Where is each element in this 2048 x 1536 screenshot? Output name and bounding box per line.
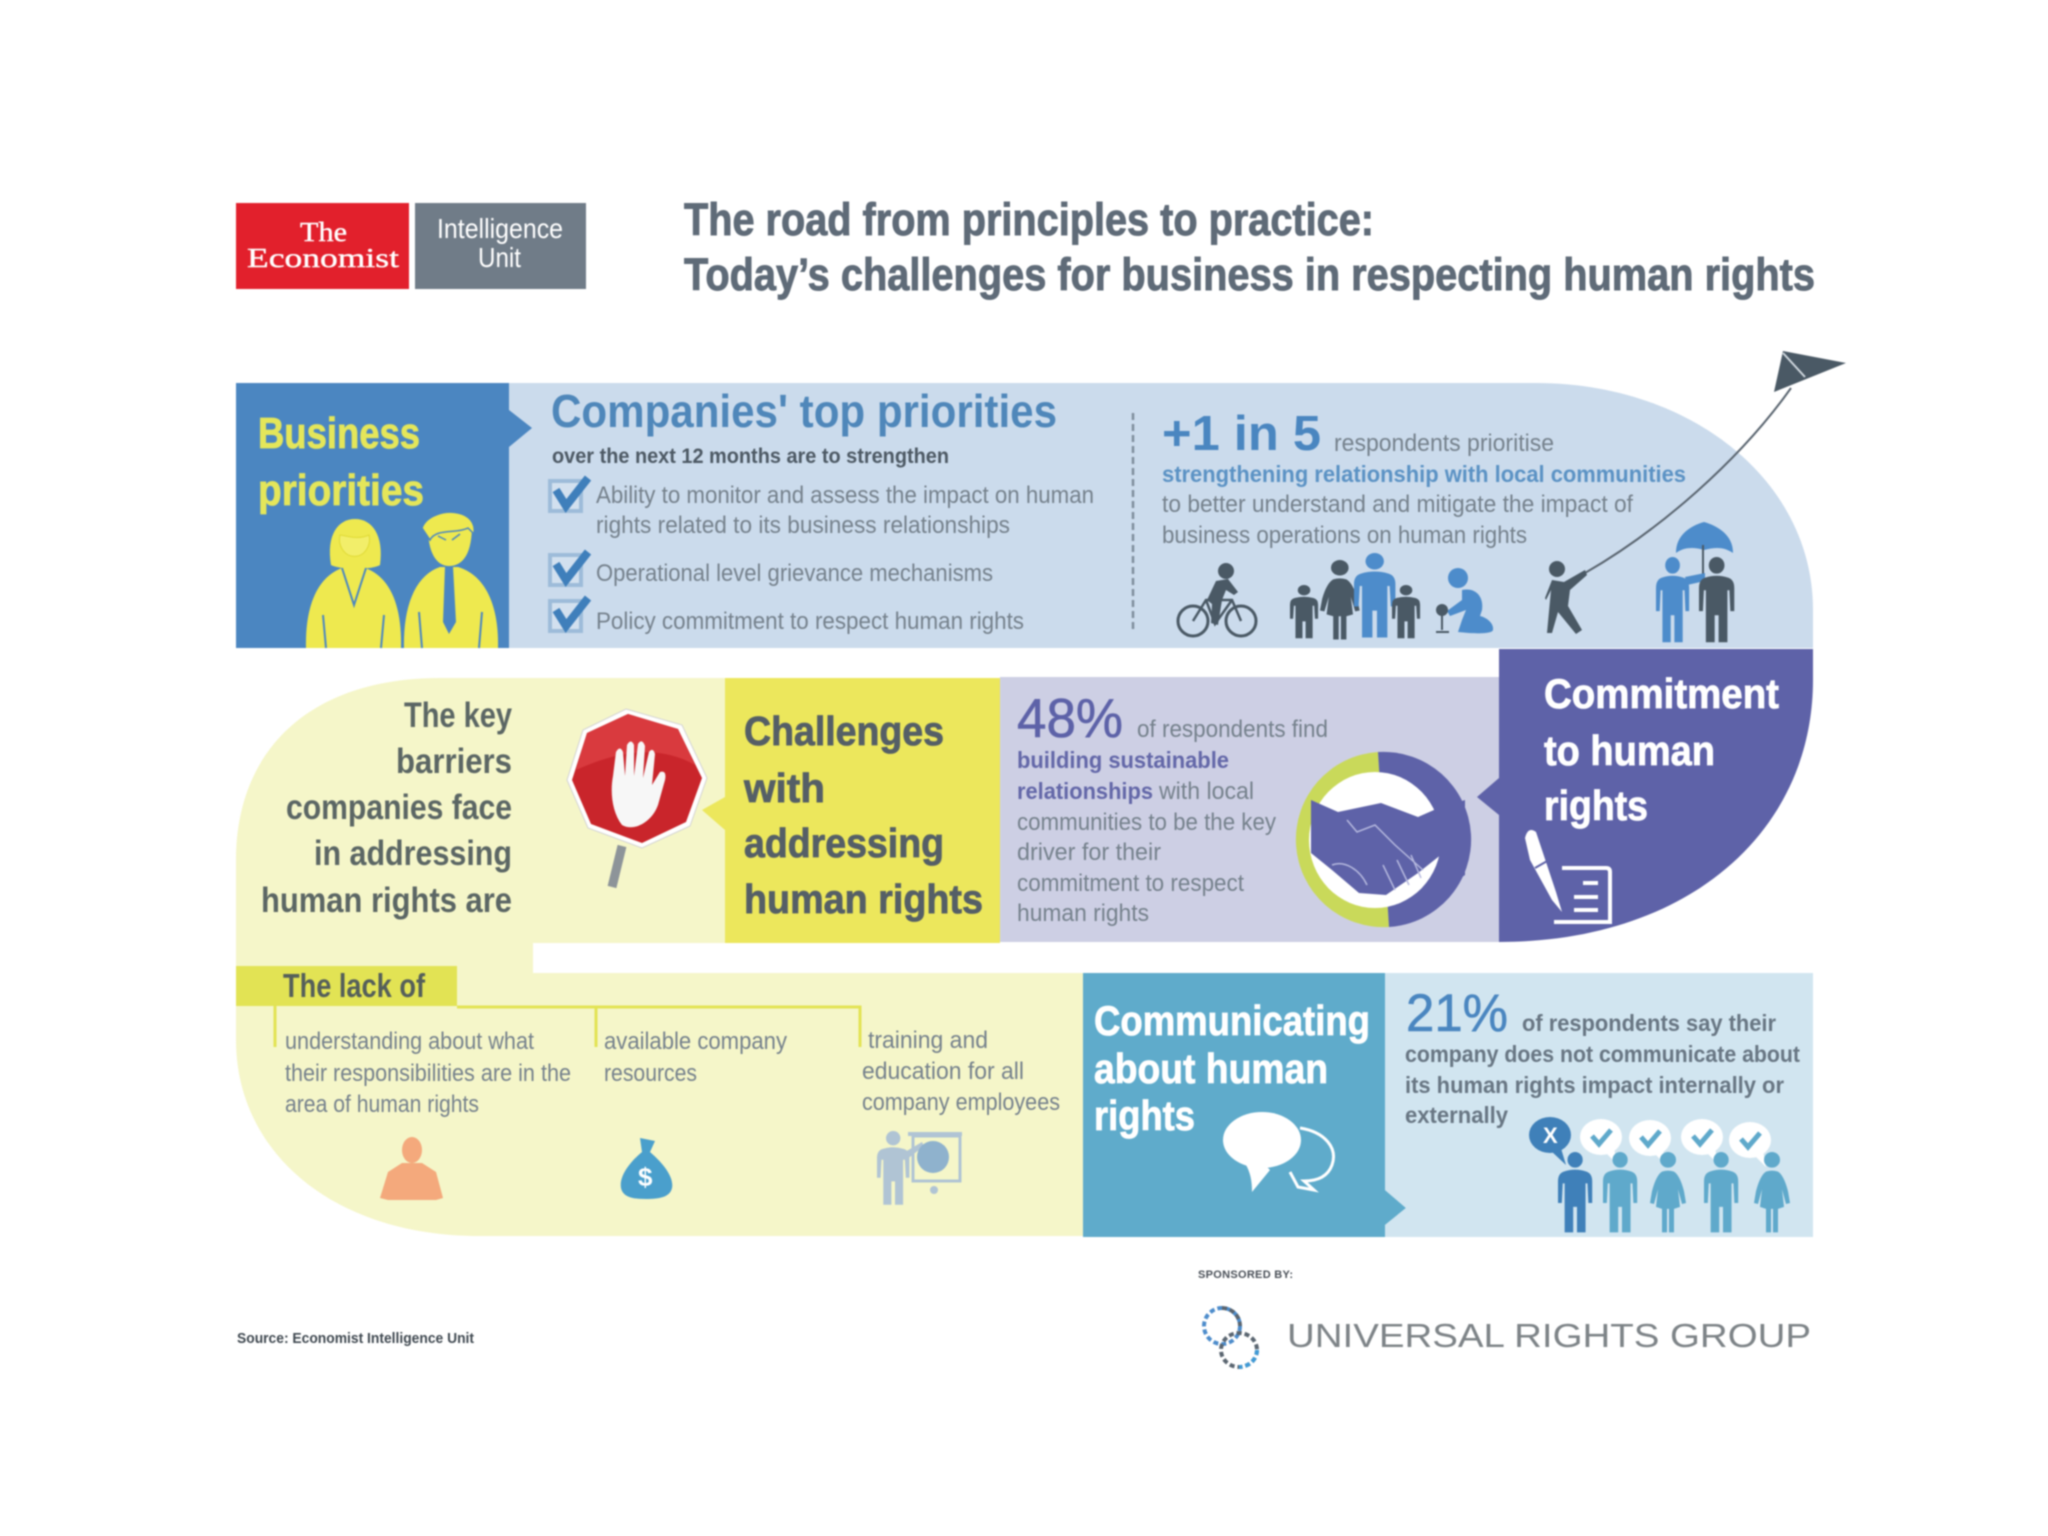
panel: challenges and lack-of band background: [236, 678, 1083, 1236]
panel: 48% statistic: with local: [1158, 778, 1254, 805]
icon: person reading: [380, 1137, 443, 1200]
text: +1 in 5 statistic: to better understand and mitigate the impact of: [1162, 491, 1633, 518]
panel: 48% statistic: human rights: [1017, 900, 1149, 927]
panel: challenges with addressing human rights: with: [743, 765, 825, 811]
text: priorities list: Policy commitment to respect human rights: [596, 608, 1024, 635]
panel: commitment to human rights: to human: [1544, 727, 1715, 774]
panel: 48% statistic: building sustainable: [1017, 747, 1229, 773]
panel: 48% statistic: commitment to respect: [1017, 870, 1244, 897]
text: priorities list: over the next 12 months are to strengthen: [552, 445, 949, 468]
icon: five people with speech bubbles: X: [1543, 1123, 1558, 1148]
title: Today’s challenges for business in respecting human rights: [684, 249, 1815, 300]
logo: The Economist Intelligence Unit: Economist: [247, 243, 400, 273]
icon: five people with speech bubbles: [1529, 1117, 1790, 1232]
icon: person planting flower: [1436, 568, 1493, 633]
text: key barriers: human rights are: [261, 881, 512, 920]
text: barrier column 1: [285, 1028, 571, 1118]
icon: businesswoman: [306, 519, 401, 648]
panel: 48% statistic: relationships: [1017, 778, 1153, 804]
icon: child flying kite: [1545, 351, 1846, 634]
panel: companies' top priorities: [509, 383, 1813, 648]
text: priorities list: [550, 445, 1094, 635]
panel: 48% statistic: [1000, 677, 1499, 942]
panel: communicating about human rights: about human: [1094, 1045, 1328, 1092]
panel: 21% statistic: 21%: [1406, 984, 1508, 1043]
logo: The Economist Intelligence Unit: The: [300, 217, 347, 247]
text: +1 in 5 statistic: business operations on human rights: [1162, 522, 1527, 549]
panel: 21% statistic: of respondents say their: [1522, 1010, 1776, 1036]
text: priorities list: Ability to monitor and assess the impact on human: [596, 482, 1094, 509]
text: +1 in 5 statistic: [1162, 407, 1686, 549]
text: barrier column 3: training and: [868, 1027, 988, 1054]
panel: 21% statistic: externally: [1405, 1102, 1508, 1128]
text: +1 in 5 statistic: respondents prioritise: [1334, 430, 1554, 457]
text: key barriers: [261, 696, 512, 920]
tag: the lack of: [236, 966, 860, 1047]
icon: checkbox 2: [550, 552, 588, 585]
title: [684, 194, 1815, 300]
title: The road from principles to practice:: [684, 194, 1374, 245]
panel: 48% statistic: driver for their: [1017, 839, 1161, 866]
logo: Universal Rights Group: [1204, 1308, 1811, 1367]
text: barrier column 2: [604, 1028, 787, 1087]
icon: checkbox 1: [550, 478, 588, 511]
panel: 21% statistic: company does not communicate about: [1405, 1041, 1800, 1067]
text: barrier column 3: company employees: [862, 1089, 1060, 1116]
panel: 48% statistic: of respondents find: [1137, 716, 1328, 743]
text: barrier column 2: available company: [604, 1028, 787, 1055]
icon: money bag: [621, 1138, 672, 1199]
icon: cyclist: [1178, 563, 1256, 636]
tag: the lack of: The lack of: [283, 967, 426, 1004]
panel: challenges with addressing human rights: human rights: [744, 876, 983, 922]
panel: challenges with addressing human rights: addressing: [744, 820, 944, 866]
panel: 48% statistic: communities to be the key: [1017, 809, 1276, 836]
text: barrier column 2: resources: [604, 1060, 697, 1087]
panel: challenges with addressing human rights: [702, 678, 1000, 943]
panel: communicating about human rights: Communicating: [1094, 997, 1370, 1044]
text: priorities list: Operational level grievance mechanisms: [596, 560, 993, 587]
text: barrier column 3: [862, 1027, 1060, 1116]
panel: 48% statistic: 48%: [1017, 687, 1123, 749]
text: barrier column 1: area of human rights: [285, 1091, 479, 1118]
icon: people under umbrella: [1656, 522, 1734, 642]
logo: Universal Rights Group: UNIVERSAL RIGHTS GROUP: [1287, 1317, 1811, 1354]
source note: Source: Economist Intelligence Unit: [237, 1330, 474, 1347]
icon: money bag: $: [638, 1162, 653, 1192]
icon: pen and document: [1525, 830, 1610, 922]
panel: 21% statistic: [1385, 973, 1813, 1237]
logo: The Economist Intelligence Unit: Unit: [478, 242, 521, 273]
text: +1 in 5 statistic: strengthening relationship with local communities: [1162, 461, 1686, 487]
panel: 21% statistic: its human rights impact internally or: [1405, 1072, 1784, 1098]
icon: businessman: [404, 512, 498, 648]
panel: commitment to human rights: Commitment: [1544, 670, 1779, 717]
heading: companies' top priorities: Companies' top priorities: [551, 385, 1057, 437]
panel: business priorities: Business: [258, 409, 420, 458]
text: +1 in 5 statistic: +1 in 5: [1162, 407, 1321, 461]
text: key barriers: companies face: [286, 788, 512, 827]
panel: challenges with addressing human rights: Challenges: [744, 708, 944, 754]
panel: business priorities: priorities: [258, 466, 424, 515]
icon: stop sign with hand: [567, 709, 707, 887]
text: key barriers: The key: [404, 696, 512, 735]
sponsored by label: SPONSORED BY:: [1198, 1269, 1293, 1281]
icon: speech bubbles: [1223, 1112, 1333, 1192]
icon: handshake in ring: [1296, 752, 1471, 927]
panel: commitment to human rights: [1477, 649, 1813, 942]
text: barrier column 1: their responsibilities are in the: [285, 1060, 571, 1087]
icon: presenter and board: [877, 1131, 962, 1205]
logo: The Economist Intelligence Unit: [236, 203, 586, 289]
text: priorities list: rights related to its business relationships: [596, 512, 1010, 539]
text: key barriers: in addressing: [314, 834, 512, 873]
text: barrier column 1: understanding about what: [285, 1028, 534, 1055]
icon: checkbox 3: [550, 598, 588, 631]
panel: communicating about human rights: rights: [1094, 1092, 1195, 1139]
panel: communicating about human rights: [1083, 973, 1406, 1237]
logo: The Economist Intelligence Unit: Intelligence: [437, 213, 563, 244]
panel: commitment to human rights: rights: [1544, 782, 1648, 829]
panel: business priorities: [236, 383, 532, 648]
text: barrier column 3: education for all: [862, 1058, 1024, 1085]
text: key barriers: barriers: [396, 742, 512, 781]
icon: family: [1290, 553, 1420, 640]
